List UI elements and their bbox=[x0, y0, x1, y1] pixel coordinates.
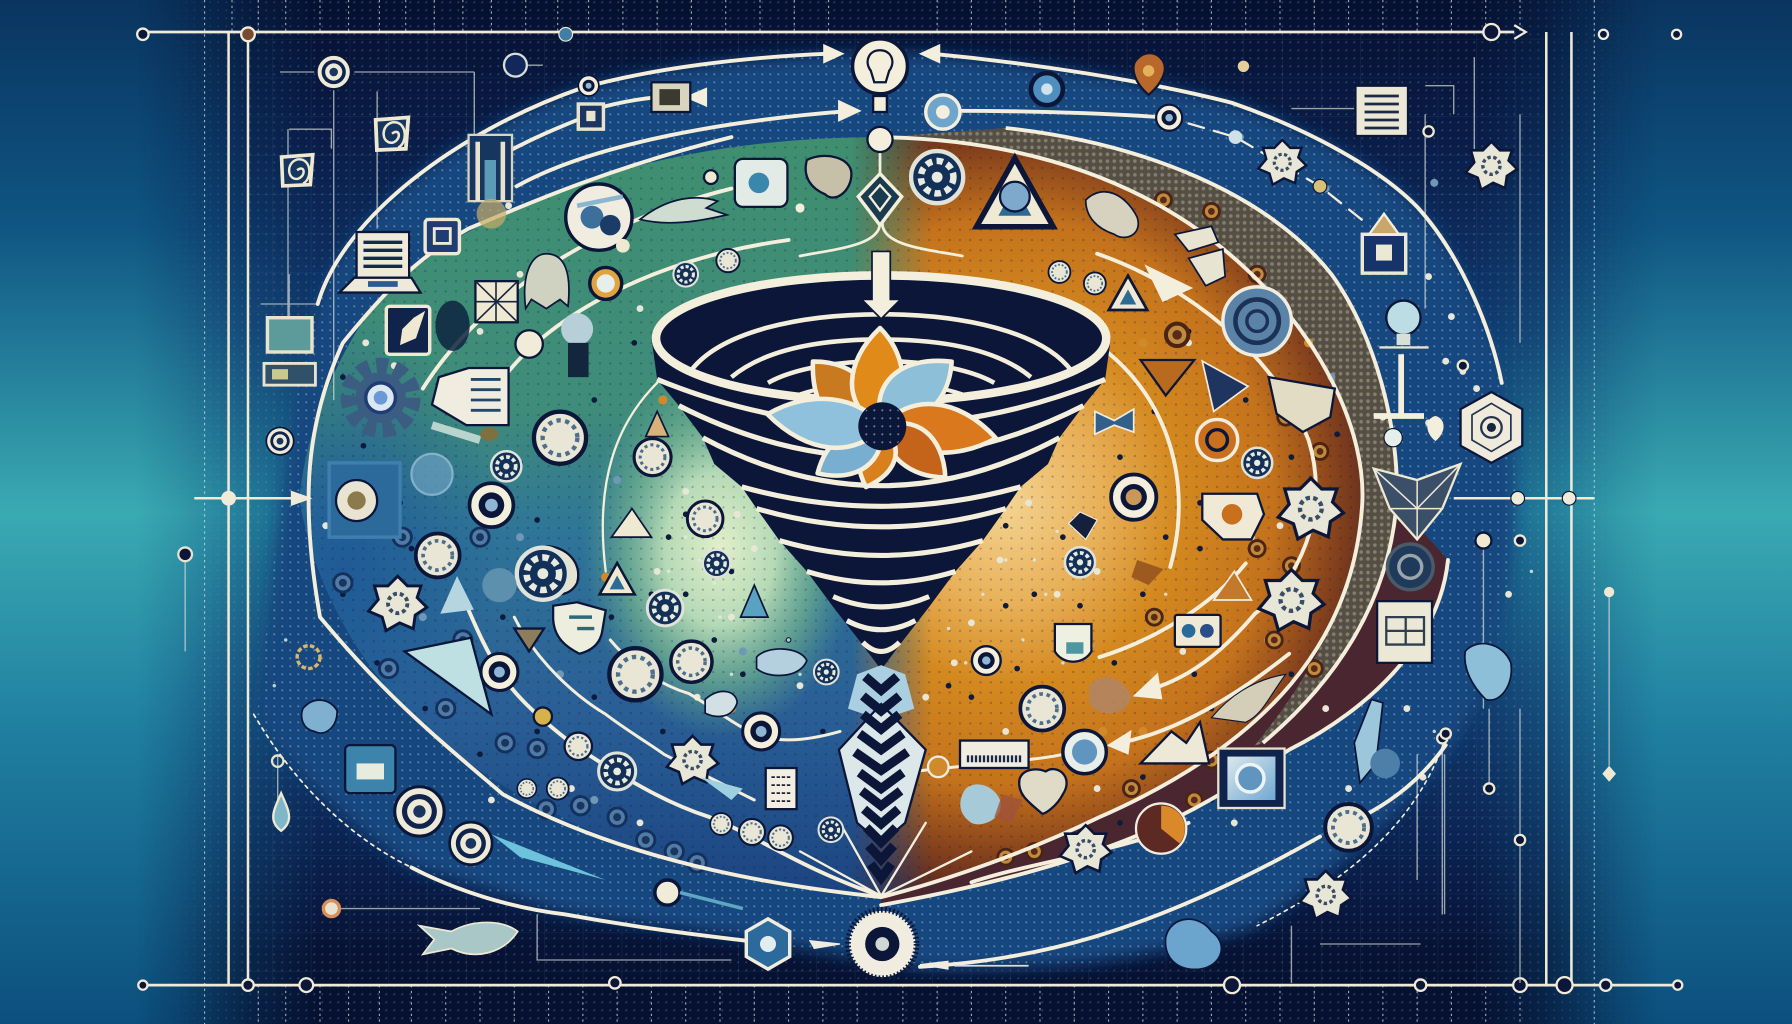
icon: house box bbox=[1362, 214, 1406, 273]
grey band outer line bbox=[1006, 128, 1397, 743]
funnel stripes bbox=[657, 379, 1105, 651]
funnel rim and inner rings bbox=[656, 275, 1106, 401]
icon: fish bbox=[419, 922, 518, 954]
funnel body bbox=[651, 338, 1111, 670]
scattered dots bbox=[274, 137, 1531, 823]
icons: inner left near funnel bbox=[517, 411, 843, 850]
funnel bbox=[651, 275, 1111, 670]
icons: bottom center bbox=[746, 871, 1351, 978]
icon: document bbox=[432, 368, 509, 441]
icon: spiral diamond bbox=[858, 174, 902, 225]
icon: fish bbox=[640, 198, 727, 223]
icon: tower bbox=[469, 135, 512, 201]
icon: folder bbox=[386, 306, 430, 354]
blueprint connectors bbox=[185, 57, 1609, 983]
outer blue band bbox=[257, 54, 1516, 970]
icon: concentric circle bbox=[1223, 287, 1291, 355]
node circle bbox=[867, 127, 893, 152]
icon: light bulb bbox=[853, 39, 907, 112]
icons: top row bbox=[317, 53, 1408, 144]
funnel stem chevrons bbox=[839, 665, 926, 878]
icons: lower left outside ring bbox=[178, 547, 743, 954]
icon: turtle bbox=[1165, 919, 1221, 969]
icon: chart circle bbox=[566, 184, 632, 250]
icon: hexagon bbox=[1461, 392, 1522, 463]
glow bbox=[477, 199, 506, 229]
icon: right bulb bbox=[1379, 301, 1429, 347]
icon: table bbox=[1377, 601, 1432, 663]
icon: square frame bbox=[329, 463, 400, 537]
top and bottom tick marks bbox=[205, 0, 1594, 1024]
icon: crossed box bbox=[475, 281, 518, 322]
outer curved arrows bbox=[254, 47, 1502, 967]
icon: web shield bbox=[1374, 464, 1461, 539]
main field: blue-green and orange-brown bbox=[300, 137, 1361, 894]
icon: head bbox=[525, 254, 569, 309]
icon: laptop bbox=[339, 232, 421, 293]
icon: hand bbox=[1354, 699, 1400, 783]
icons: upper right bbox=[976, 140, 1522, 463]
muted lower-left and lower-right circles bbox=[334, 192, 1328, 872]
icons: lower right bbox=[928, 126, 1616, 873]
icons: upper left bbox=[264, 117, 963, 455]
top center nodes bbox=[853, 39, 907, 225]
icon: sun burst bbox=[848, 910, 917, 978]
lower right brown band bbox=[881, 503, 1448, 905]
grey speckled band bbox=[881, 128, 1397, 746]
icon: bulb circle bbox=[561, 313, 593, 377]
icons: left side bbox=[329, 267, 635, 726]
icon: hand shell bbox=[1465, 644, 1511, 700]
icon: photo tile bbox=[735, 159, 787, 207]
icons: right orange field bbox=[972, 287, 1343, 763]
flower pinwheel bbox=[765, 328, 999, 492]
icon: gear bbox=[349, 366, 413, 430]
main outline and inner arcs bbox=[309, 137, 1362, 897]
node: left arc bbox=[515, 330, 543, 358]
arrow into funnel bbox=[862, 251, 901, 319]
